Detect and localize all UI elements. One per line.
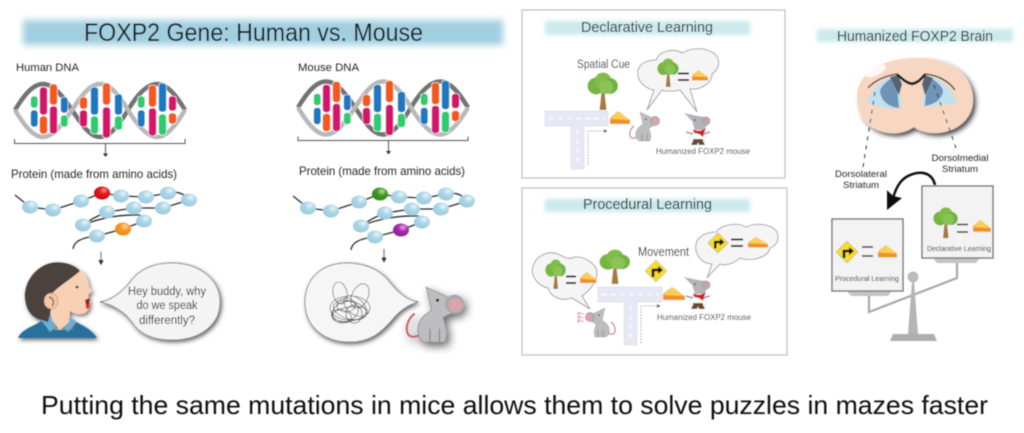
icon: cheese xyxy=(610,111,630,124)
icon: tree xyxy=(600,249,630,284)
label: Dorsolateral Striatum: Dorsolateral xyxy=(835,169,887,179)
protein chain with human mutations xyxy=(15,186,197,249)
curved arrow: declarative to procedural xyxy=(887,173,935,210)
label: Mouse DNA: Mouse DNA xyxy=(298,62,360,74)
dashed leader: dorsolateral xyxy=(863,92,875,167)
icon: boy speaking xyxy=(18,262,97,338)
label: Humanized FOXP2 mouse: Humanized FOXP2 mouse xyxy=(656,146,750,156)
icon: humanized mouse xyxy=(684,113,710,145)
box: Procedural Learning: Procedural Learning xyxy=(835,274,899,283)
heading banner: Procedural Learning xyxy=(545,196,750,213)
label: Dorsolateral Striatum: Striatum xyxy=(843,180,879,190)
protein chain with mouse residues xyxy=(293,188,475,250)
label: Dorsolmedial Striatum: Dorsolmedial xyxy=(932,153,988,163)
icon: confused grey mouse xyxy=(585,308,615,337)
icon: grey mouse xyxy=(630,112,660,141)
arrowhead xyxy=(103,154,108,157)
speech bubble with scribble xyxy=(305,263,418,342)
caption: Putting the same mutations in mice allows them to solve puzzles in mazes faster xyxy=(41,390,988,420)
icon: tree xyxy=(588,72,618,110)
thought bubble: sign equals cheese xyxy=(696,224,778,278)
icon: human DNA helix xyxy=(15,83,185,138)
arrow to boy xyxy=(99,252,103,264)
label: Dorsolmedial Striatum xyxy=(932,153,988,174)
label: Humanized FOXP2 mouse: Humanized FOXP2 mouse xyxy=(657,312,751,322)
label: Dorsolateral Striatum xyxy=(835,169,887,190)
icon: cheese xyxy=(663,287,685,300)
speech bubble: boy xyxy=(100,263,220,340)
speech bubble: boy: Hey buddy, why xyxy=(128,286,206,298)
bracket and arrow from DNA to protein xyxy=(298,136,468,151)
dashed leader: dorsomedial xyxy=(934,85,956,148)
label: Movement: Movement xyxy=(638,245,689,259)
panel: Procedural Learning xyxy=(522,188,787,355)
box: Declarative Learning: Declarative Learning xyxy=(927,244,991,253)
label: Human DNA: Human DNA xyxy=(16,62,80,74)
title banner: FOXP2 Gene Human vs. Mouse: FOXP2 Gene: Human vs. Mouse xyxy=(84,19,423,47)
T maze xyxy=(598,287,662,345)
arrowhead xyxy=(386,151,391,154)
panel: Humanized FOXP2 Brain xyxy=(817,29,1013,341)
icon: turn sign xyxy=(645,260,667,282)
icon: mouse xyxy=(407,287,464,342)
arrow to mouse xyxy=(382,249,386,262)
thought bubble: tree equals cheese xyxy=(532,253,597,309)
icon: humanized mouse xyxy=(684,277,710,309)
T maze xyxy=(545,111,608,169)
speech bubble: boy: do we speak xyxy=(136,300,198,312)
label: Spatial Cue: Spatial Cue xyxy=(577,59,630,71)
speech bubble: boy: differently? xyxy=(139,315,195,327)
balance scale xyxy=(847,258,980,341)
heading banner: Procedural Learning: Procedural Learning xyxy=(583,196,712,213)
box: Procedural Learning xyxy=(832,219,903,291)
heading banner: Humanized FOXP2 Brain: Humanized FOXP2 Brain xyxy=(837,29,993,45)
heading banner: Declarative Learning xyxy=(545,19,750,36)
panel: Declarative Learning xyxy=(522,10,785,178)
thought bubble: tree equals cheese xyxy=(638,49,719,112)
icon: brain cross section xyxy=(857,58,973,133)
bracket and arrow from DNA to protein xyxy=(14,139,185,154)
icon: mouse DNA helix xyxy=(298,80,468,136)
label: mouse protein: Protein (made from amino acids) xyxy=(299,164,465,178)
label: Dorsolmedial Striatum: Striatum xyxy=(942,164,978,174)
confused marks: ??? xyxy=(576,312,586,323)
heading banner: Declarative Learning: Declarative Learning xyxy=(581,19,713,36)
panel: human pathway xyxy=(11,62,220,340)
label: human protein: Protein (made from amino acids) xyxy=(11,167,177,181)
box: Declarative Learning xyxy=(922,186,993,258)
panel: mouse pathway xyxy=(293,62,475,342)
